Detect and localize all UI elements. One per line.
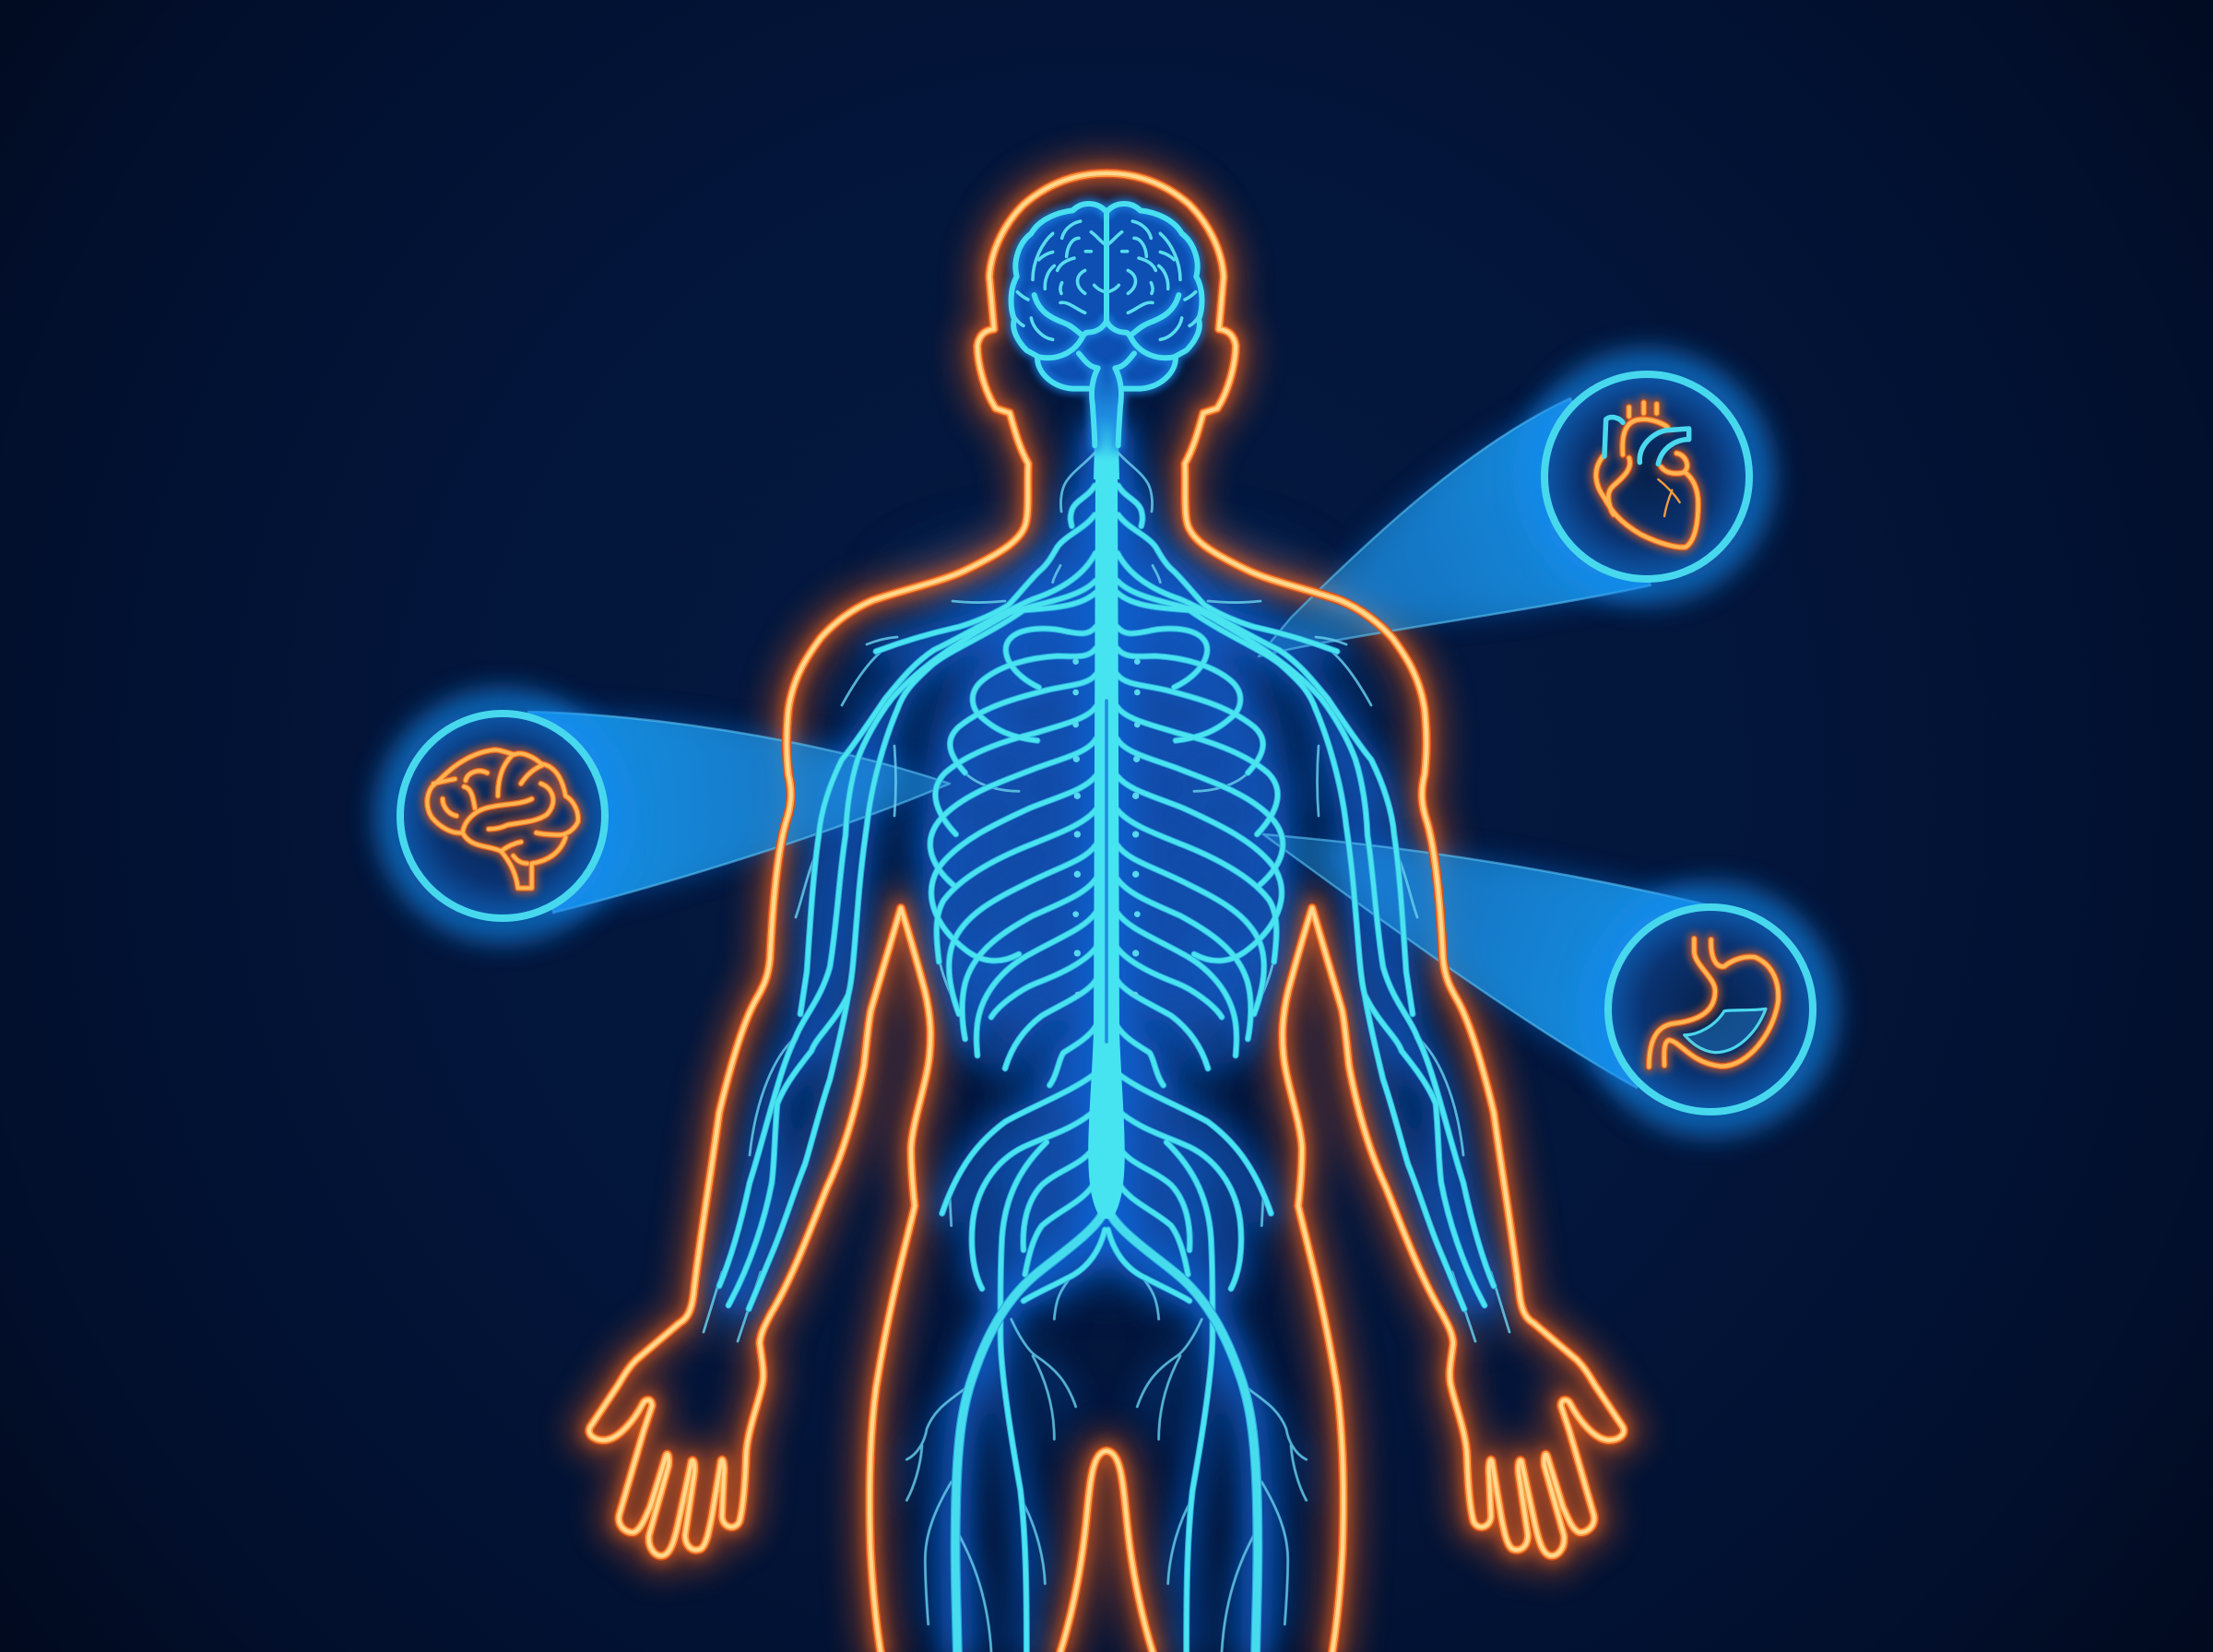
projection beam: brain callout [528, 712, 950, 913]
brain glow and lines [1012, 204, 1201, 445]
beam glow [528, 398, 1709, 1088]
spinal cord centre line [1105, 701, 1108, 1042]
brain in head [1012, 203, 1201, 479]
chest and pelvis ambient glow [894, 535, 1319, 1281]
brain fill [1012, 203, 1201, 415]
nerve network halo [704, 442, 1509, 1652]
projection beam: stomach callout [1263, 834, 1709, 1088]
callout: heart icon circle [1538, 368, 1756, 585]
rib ganglia dots [1072, 658, 1141, 997]
icon: heart [1596, 403, 1698, 548]
callout: brain icon circle [394, 707, 611, 925]
brain stem fill [1094, 364, 1119, 479]
nervous system: spine and branching nerves [704, 454, 1509, 1652]
spinal cord [1088, 475, 1125, 1219]
icon: brain [427, 749, 578, 888]
human body neon outline [589, 173, 1624, 1652]
body outline outer glow [589, 173, 1624, 1652]
projection beam: heart callout [1259, 398, 1651, 656]
icon: stomach [1649, 938, 1779, 1067]
callout: stomach icon circle [1602, 901, 1819, 1118]
